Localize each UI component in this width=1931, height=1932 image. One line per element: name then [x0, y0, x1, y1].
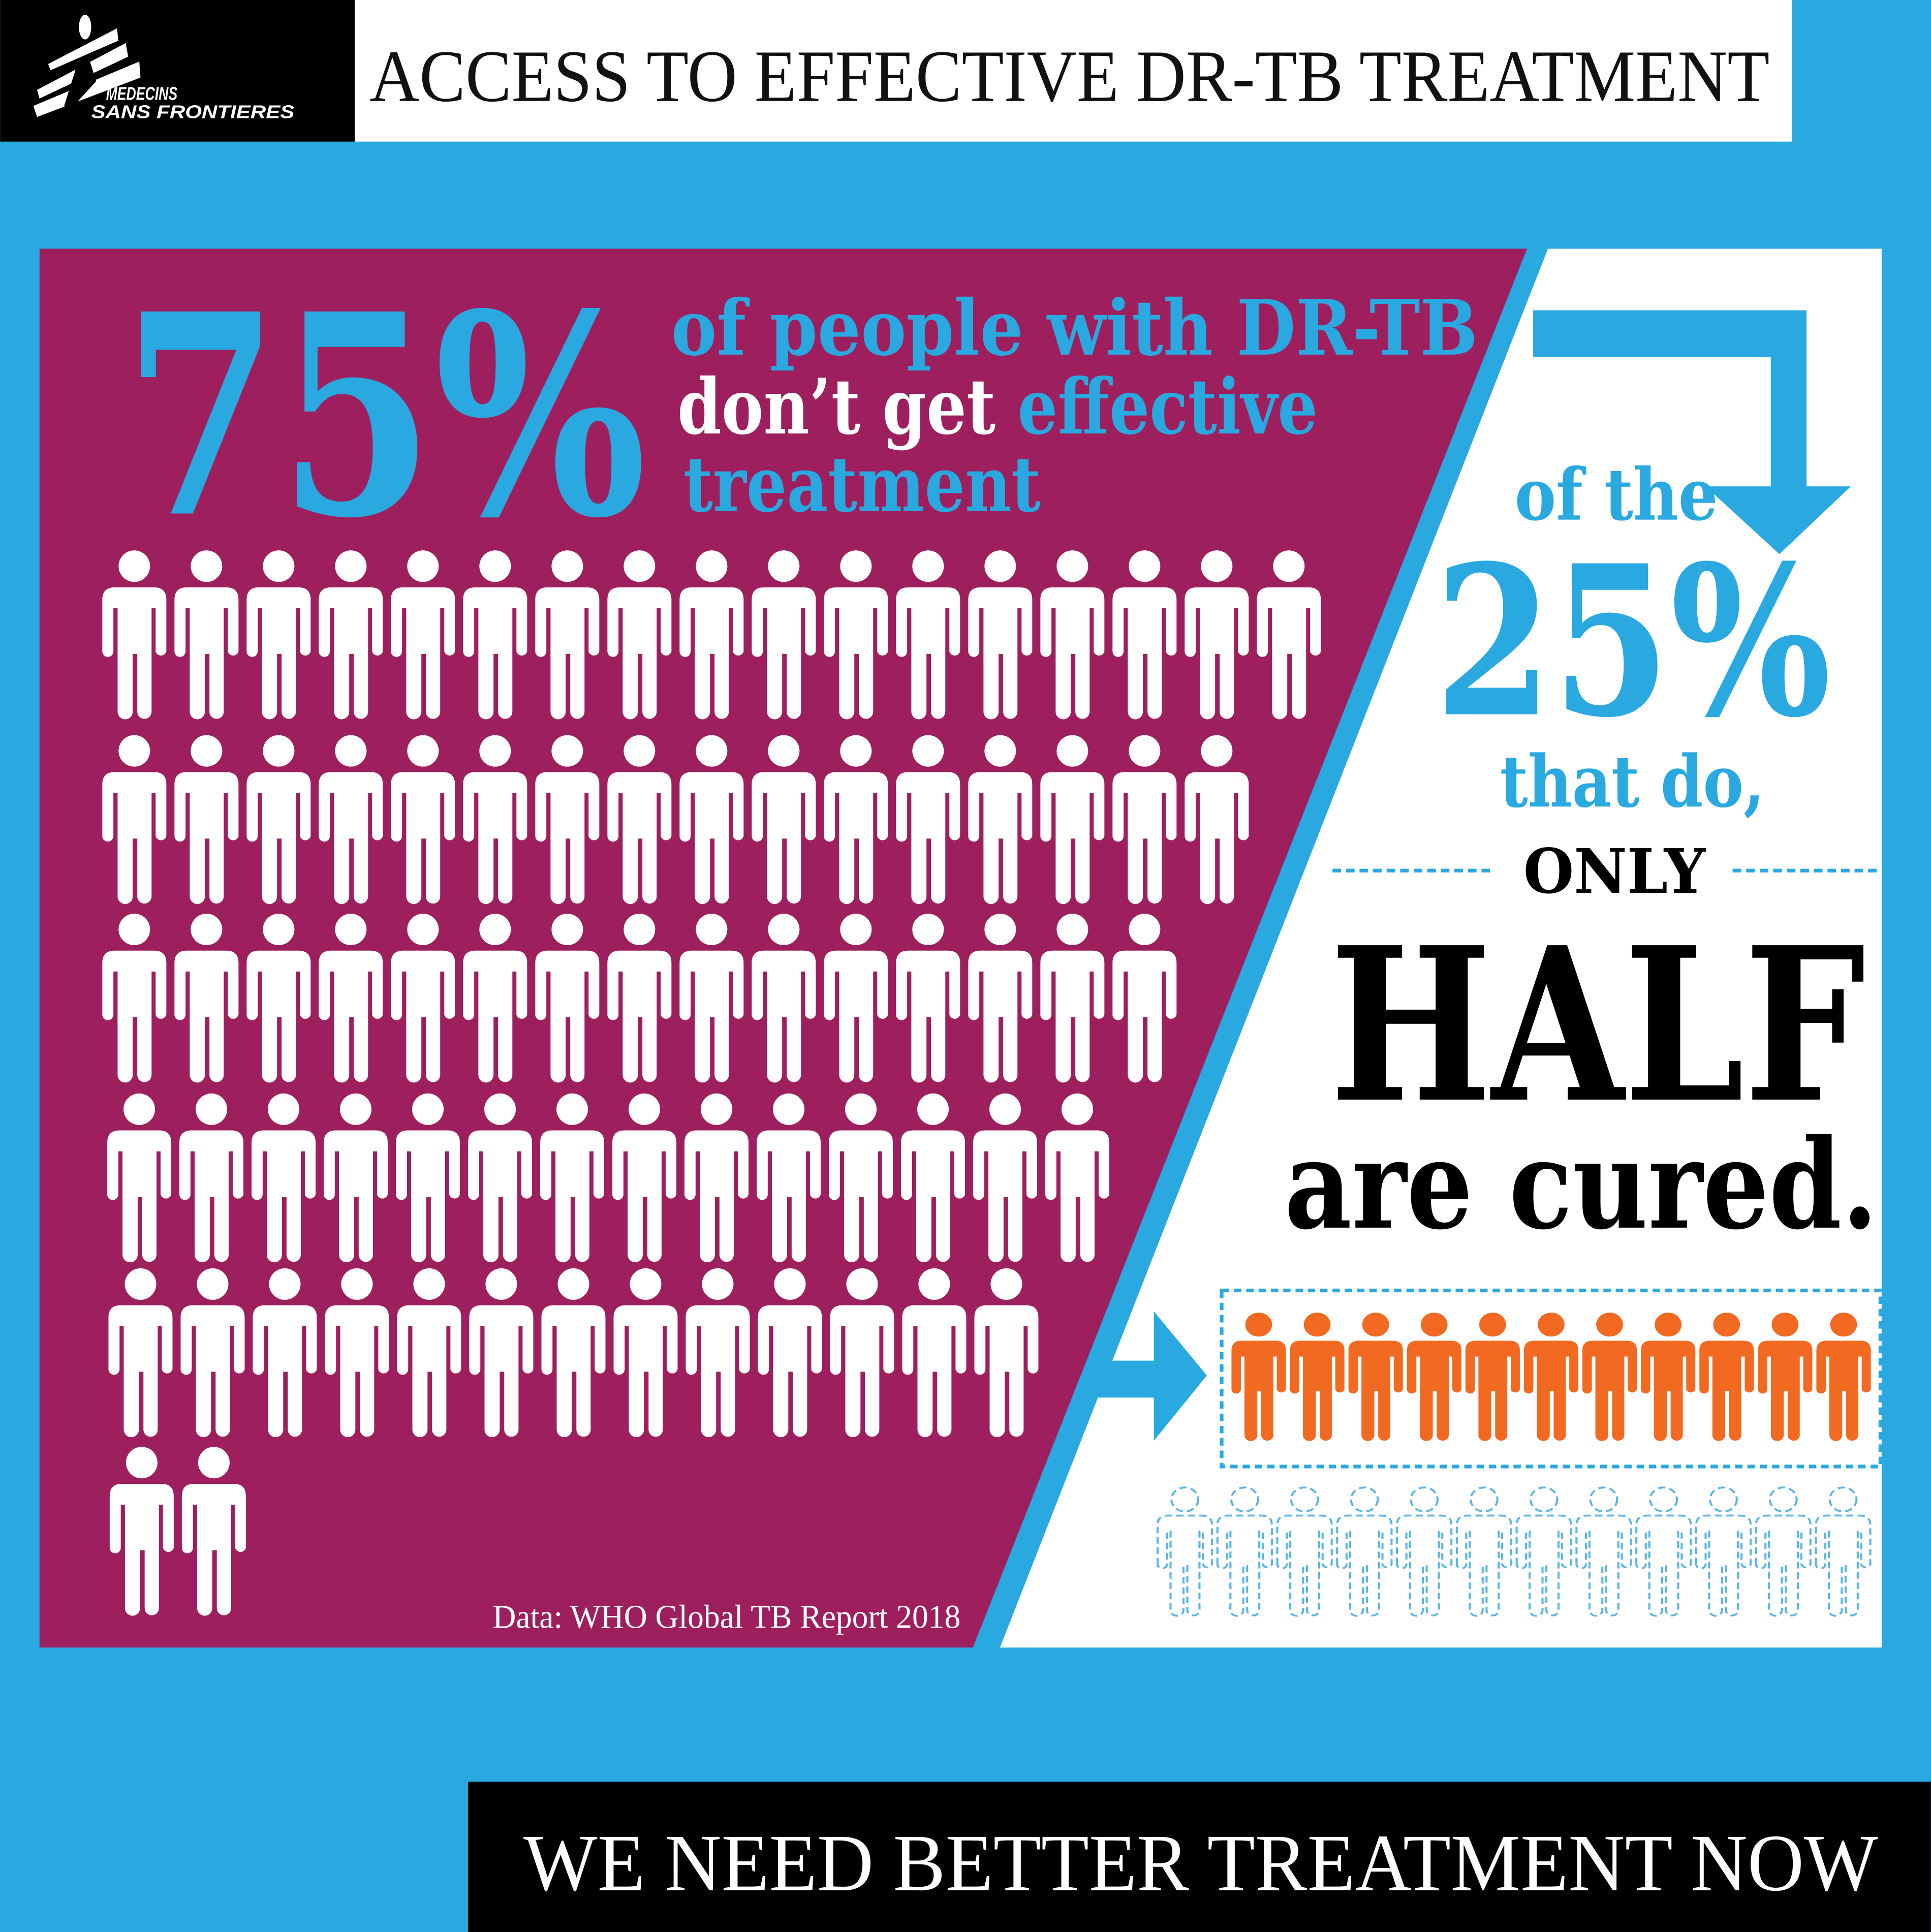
statement text: treatment: [683, 440, 1041, 529]
text: of the 25% that do: that do,: [1500, 740, 1765, 824]
text: of the 25% that do: 25%: [1435, 520, 1831, 763]
arrow: down-turning: [1533, 310, 1851, 554]
statement text: of people with DR-TB: [671, 284, 1478, 373]
cured group: orange figures: [1222, 1291, 1880, 1467]
logo panel: MEDECINS: [106, 83, 177, 104]
title bar: [355, 0, 1792, 142]
only divider: ONLY: [1523, 835, 1706, 908]
statement text: [671, 284, 1478, 529]
bottom banner: WE NEED BETTER TREATMENT NOW: [523, 1818, 1878, 1908]
source note: Data: WHO Global TB Report 2018: [492, 1599, 960, 1635]
bottom banner: [468, 1782, 1931, 1932]
arrow: right: [1096, 1312, 1207, 1441]
logo panel: [0, 0, 355, 142]
text: of the 25% that do: of the: [1515, 453, 1718, 537]
not cured: outline figures: [1158, 1487, 1871, 1616]
headline 75%: 75%: [123, 253, 646, 579]
text: HALF are cured: [1285, 901, 1878, 1257]
logo panel: SANS FRONTIERES: [91, 102, 294, 122]
people grid: 77 white figures: [102, 550, 1321, 1616]
title bar: ACCESS TO EFFECTIVE DR-TB TREATMENT: [369, 36, 1769, 117]
panel: treated 25%: [1000, 248, 1882, 1647]
text: of the 25% that do: [1435, 453, 1831, 824]
panel: untreated 75%: [40, 248, 1527, 1647]
statement text: don’t get effective: [677, 362, 1318, 452]
